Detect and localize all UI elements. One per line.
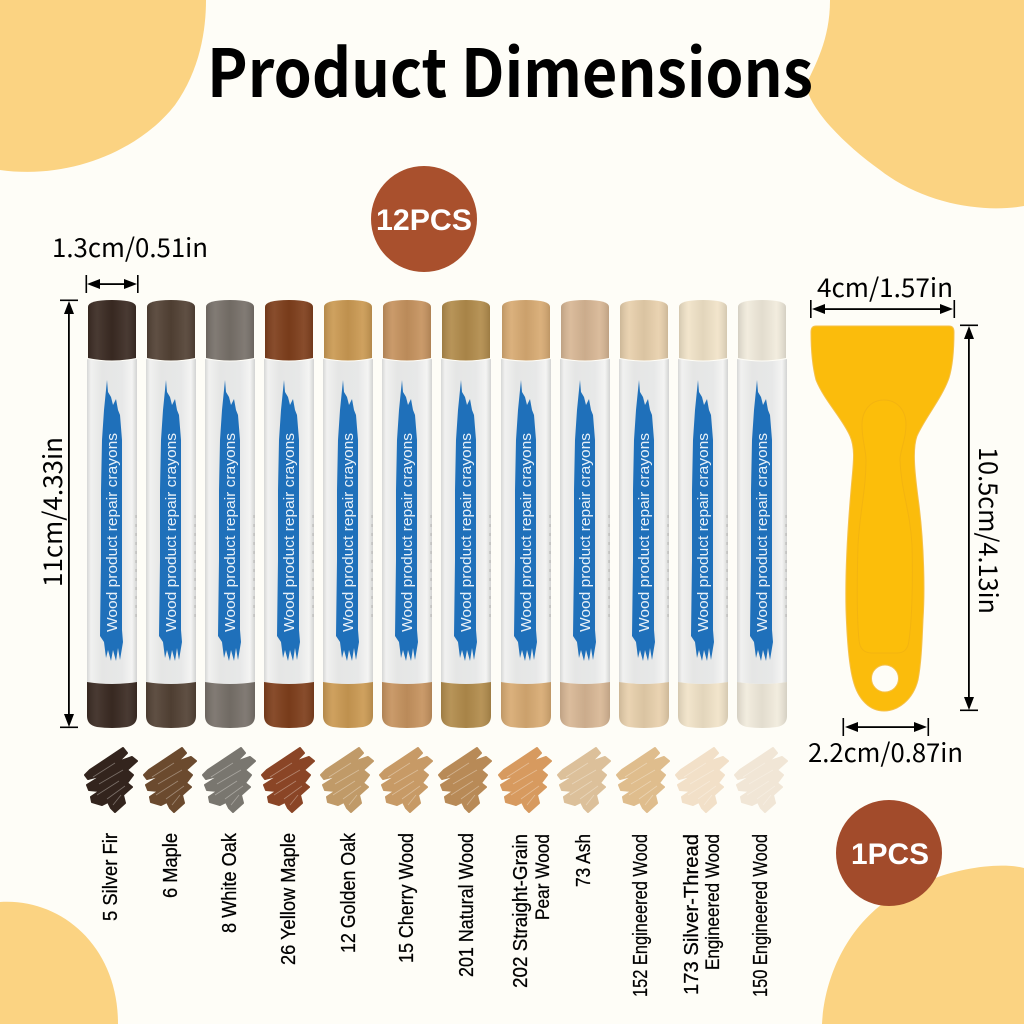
badge: 1PCS — [836, 800, 942, 906]
crayon: 150 Engineered Wood: Wood product repair crayons — [754, 433, 771, 632]
crayon: 201 Natural Wood — [441, 300, 491, 728]
crayon: 26 Yellow Maple: Wood product repair crayons — [281, 433, 298, 632]
crayon: 202 Straight-Grain Pear Wood — [501, 300, 551, 728]
colour labels: 73 Ash — [573, 834, 595, 887]
crayon: 150 Engineered Wood — [737, 300, 787, 728]
badge: 1PCS: 1PCS — [851, 838, 929, 871]
crayon: 8 White Oak: Wood product repair crayons — [222, 433, 239, 632]
dimension: crayon height: 11cm/4.33in — [33, 437, 70, 587]
crayon: 12 Golden Oak — [323, 300, 373, 728]
colour labels: 152 Engineered Wood — [630, 834, 652, 997]
dimension: scraper width: 4cm/1.57in — [817, 268, 953, 305]
scraper — [811, 326, 954, 711]
colour labels: 150 Engineered Wood — [750, 834, 772, 997]
title: Product Dimensions — [207, 21, 813, 117]
dimension: scraper width — [810, 268, 955, 318]
corner blob: top left — [0, 0, 206, 172]
badge: 12PCS: 12PCS — [376, 204, 472, 237]
crayon: 73 Ash: Wood product repair crayons — [577, 433, 594, 632]
dimension: scraper height — [960, 324, 1008, 711]
colour labels: Engineered Wood — [703, 834, 724, 970]
crayon: 201 Natural Wood: Wood product repair crayons — [458, 433, 475, 632]
dimension: crayon width: 1.3cm/0.51in — [52, 228, 208, 265]
dimension: scraper handle width: 2.2cm/0.87in — [808, 733, 963, 770]
dimension: scraper height: 10.5cm/4.13in — [971, 447, 1008, 614]
dimension: crayon width — [52, 228, 208, 293]
crayon: 152 Engineered Wood: Wood product repair crayons — [636, 433, 653, 632]
colour labels: 6 Maple — [160, 833, 182, 898]
crayon: 6 Maple: Wood product repair crayons — [163, 433, 180, 632]
crayon: 173 Silver-Thread Engineered Wood — [678, 300, 728, 728]
crayon: 15 Cherry Wood — [382, 300, 432, 728]
colour labels: 26 Yellow Maple — [278, 833, 300, 965]
colour labels — [100, 832, 772, 997]
corner blob: top right — [806, 0, 1024, 208]
corner blob: bottom left — [0, 902, 118, 1024]
colour labels: 173 Silver-Thread — [681, 834, 703, 995]
crayon: 5 Silver Fir: Wood product repair crayons — [104, 433, 121, 632]
colour labels: 12 Golden Oak — [338, 832, 360, 953]
colour labels: 15 Cherry Wood — [396, 833, 418, 963]
colour labels: 201 Natural Wood — [456, 833, 478, 977]
dimension: crayon height — [33, 300, 78, 728]
colour swatches — [85, 748, 787, 812]
corner blob: bottom right — [822, 866, 1024, 1024]
colour labels: 5 Silver Fir — [100, 833, 122, 921]
crayon: 12 Golden Oak: Wood product repair crayons — [340, 433, 357, 632]
crayon: 152 Engineered Wood — [619, 300, 669, 728]
crayon: 73 Ash — [560, 300, 610, 728]
colour labels: 8 White Oak — [219, 832, 241, 933]
crayon: 15 Cherry Wood: Wood product repair crayons — [399, 433, 416, 632]
colour labels: 202 Straight-Grain — [510, 834, 532, 988]
crayon: 6 Maple — [146, 300, 196, 728]
badge: 12PCS — [371, 166, 477, 272]
colour labels: Pear Wood — [533, 834, 554, 920]
crayon: 8 White Oak — [205, 300, 255, 728]
crayon: 173 Silver-Thread Engineered Wood: Wood product repair crayons — [695, 433, 712, 632]
crayon: 26 Yellow Maple — [264, 300, 314, 728]
crayon: 202 Straight-Grain Pear Wood: Wood product repair crayons — [518, 433, 535, 632]
crayon: 5 Silver Fir — [87, 300, 137, 728]
